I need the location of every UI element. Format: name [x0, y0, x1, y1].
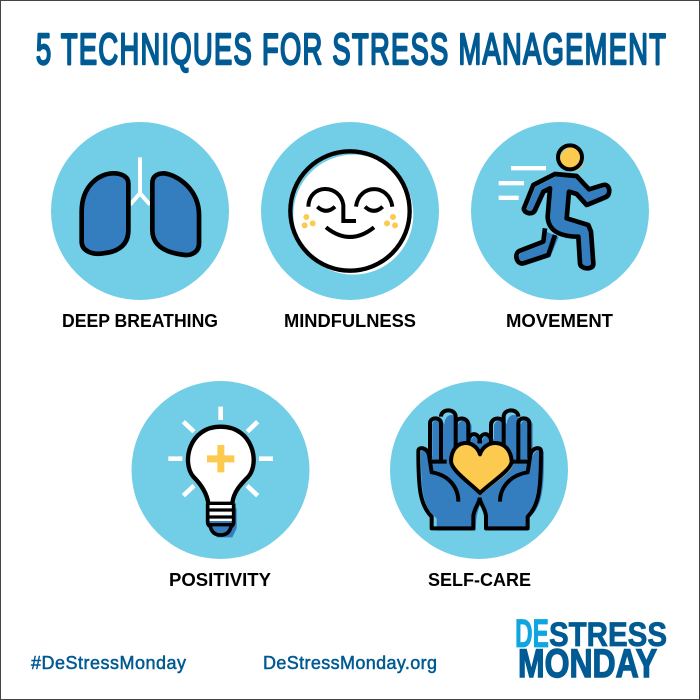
icon: hands holding heart: [418, 410, 544, 531]
icon: runner: [499, 145, 611, 270]
label: MOVEMENT: [506, 310, 614, 331]
icon: light bulb: [168, 407, 273, 537]
title: 5 TECHNIQUES FOR STRESS MANAGEMENT: [36, 24, 666, 74]
icon circle: bulb background: [132, 381, 310, 559]
icon circle: face background: [261, 122, 439, 300]
panel: self-care: [390, 381, 568, 590]
icon circle: lungs background: [51, 122, 229, 300]
panel: positivity: [132, 381, 310, 590]
panel: movement: [471, 122, 649, 331]
logo: MONDAY: [518, 642, 657, 686]
label: SELF-CARE: [428, 569, 531, 590]
logo: [515, 612, 667, 686]
icon circle: hands background: [390, 381, 568, 559]
website: DeStressMonday.org: [263, 653, 437, 673]
icon: lungs: [82, 157, 201, 257]
label: POSITIVITY: [169, 569, 272, 590]
hashtag: #DeStressMonday: [31, 653, 186, 673]
panel: mindfulness: [261, 122, 439, 331]
logo: STRESS: [549, 616, 667, 654]
logo: DE: [515, 612, 549, 656]
icon circle: runner background: [471, 122, 649, 300]
panel: deep breathing: [51, 122, 229, 331]
label: DEEP BREATHING: [62, 310, 218, 331]
icon: smiling face: [290, 151, 413, 275]
label: MINDFULNESS: [284, 310, 416, 331]
